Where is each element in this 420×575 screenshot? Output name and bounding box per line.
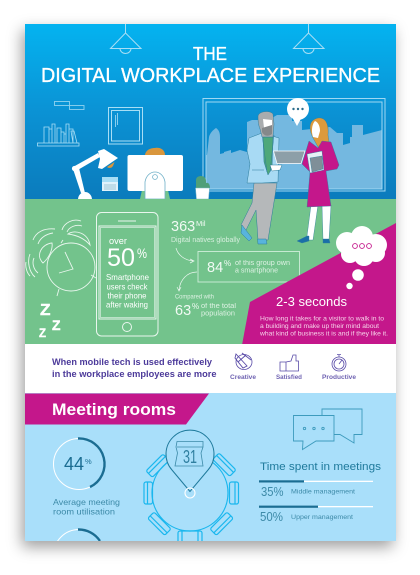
callout: 84 percent: % [224, 259, 231, 268]
jacket [247, 133, 279, 183]
icon: calendar pin [166, 430, 214, 498]
hair [310, 118, 329, 151]
panel: window with skyline [203, 98, 385, 191]
text: digital natives: 363 [171, 219, 195, 235]
head [258, 112, 274, 137]
icon: desk lamp [72, 149, 118, 200]
title [42, 46, 380, 82]
donut: second statistic [54, 529, 104, 575]
text: 2-3 seconds: 2-3 seconds [276, 294, 347, 309]
icon: ceiling lamp left [110, 24, 141, 54]
icon: satisfied: Satisfied [276, 374, 302, 381]
title: DIGITAL WORKPLACE EXPERIENCE [41, 65, 380, 87]
icon: ceiling lamp right [294, 24, 324, 54]
text: visitor description: How long it takes for a visitor to walk in to [260, 316, 384, 322]
text: smartphone statistic: 50 [107, 244, 135, 272]
text: smartphone statistic [106, 236, 149, 309]
text: digital natives: Mil [196, 219, 206, 228]
panel: employee benefits band [25, 344, 396, 394]
stat: upper management [259, 506, 373, 524]
shirt [263, 137, 273, 175]
text: 63 percent: % [192, 302, 199, 311]
text: 63 percent: population [201, 310, 235, 318]
icon: productive: Productive [322, 374, 356, 381]
callout: 84 percent: a smartphone [235, 268, 278, 275]
icon: Z letters: Z [52, 318, 60, 333]
stat: middle management [259, 480, 373, 499]
text: smartphone statistic: users check [106, 281, 148, 291]
text: smartphone statistic: over [109, 236, 127, 247]
callout: 84 percent [198, 252, 300, 282]
text: mobile tech statement [52, 357, 216, 380]
icon: productive [322, 354, 356, 381]
text: digital natives: Digital natives globally [171, 235, 240, 244]
icon: creative [230, 353, 256, 381]
icon: wall shelves [54, 102, 84, 110]
text: visitor description [259, 316, 388, 338]
callout: 84 percent: 84 [207, 260, 223, 276]
panel: illustrated people [241, 98, 339, 244]
icon: picture frame [108, 108, 142, 144]
icon: alarm clock [26, 220, 96, 296]
panel: meeting rooms [25, 393, 396, 575]
text: 63 percent [175, 294, 236, 317]
arrow: natives to group [176, 248, 194, 263]
text: smartphone statistic: after waking [106, 299, 148, 309]
icon: Z letters [39, 304, 60, 338]
text: meeting utilisation [53, 497, 120, 516]
donut: 44 percent: % [85, 457, 92, 466]
text: visitor description: what kind of business it is and if they like it. [259, 330, 388, 338]
trousers [241, 183, 277, 240]
icon: calendar pin: 31 [183, 447, 197, 467]
text: 63 percent: Compared with [175, 294, 215, 300]
heading banner [25, 394, 209, 424]
text: smartphone statistic: their phone [108, 290, 147, 300]
man [241, 112, 282, 244]
icon: phone outline [96, 212, 158, 336]
donut: 44 percent [54, 438, 105, 490]
icon: Z letters: Z [40, 302, 51, 319]
panel: magenta callout [242, 223, 396, 345]
title: THE [193, 43, 227, 64]
callout: 84 percent: of this group own [235, 260, 290, 267]
shoes [297, 236, 330, 243]
dress [302, 141, 339, 207]
icon: chat bubbles [294, 409, 362, 450]
donut: 44 percent: 44 [64, 454, 84, 474]
shoes [241, 225, 252, 241]
speech bubble [287, 98, 309, 126]
text: mobile tech statement: When mobile tech is used effectively [52, 357, 213, 368]
text: mobile tech statement: in the workplace employees are more [52, 369, 216, 380]
icon: cactus [196, 176, 210, 199]
icon: bookshelf [38, 124, 79, 146]
stat: upper management: 50% [260, 510, 283, 524]
folder and tablet [307, 151, 324, 173]
text: smartphone statistic: % [137, 245, 147, 261]
icon: satisfied [276, 355, 302, 381]
heading banner: Meeting rooms [52, 400, 176, 419]
skyline [206, 115, 382, 189]
text: 63 percent: 63 [175, 303, 191, 319]
legs [307, 205, 331, 240]
text: meeting utilisation: Average meeting [53, 497, 120, 507]
laptop [274, 151, 305, 164]
icon: meeting table with chairs [144, 453, 238, 543]
woman [297, 118, 339, 243]
arrow: group to population [177, 272, 197, 291]
icon: thought cloud [336, 226, 387, 289]
text: visitor description: a building and make up their mind about [260, 323, 379, 330]
icon: Z letters: Z [39, 328, 46, 340]
icon: notepad [102, 177, 118, 191]
heading: time spent in meetings: Time spent in meetings [260, 461, 382, 473]
stat: middle management: 35% [261, 485, 284, 499]
stat: middle management: Middle management [291, 488, 355, 496]
panel: header [25, 24, 396, 200]
text: digital natives [171, 219, 240, 244]
text: smartphone statistic: Smartphone [106, 272, 149, 282]
panel: green stats [25, 199, 396, 345]
stat: upper management: Upper management [291, 514, 353, 521]
text: 63 percent: of the total [201, 303, 236, 310]
text: meeting utilisation: room utilisation [53, 506, 115, 516]
icon: desktop computer with person [128, 148, 183, 199]
icon: creative: Creative [230, 374, 256, 381]
